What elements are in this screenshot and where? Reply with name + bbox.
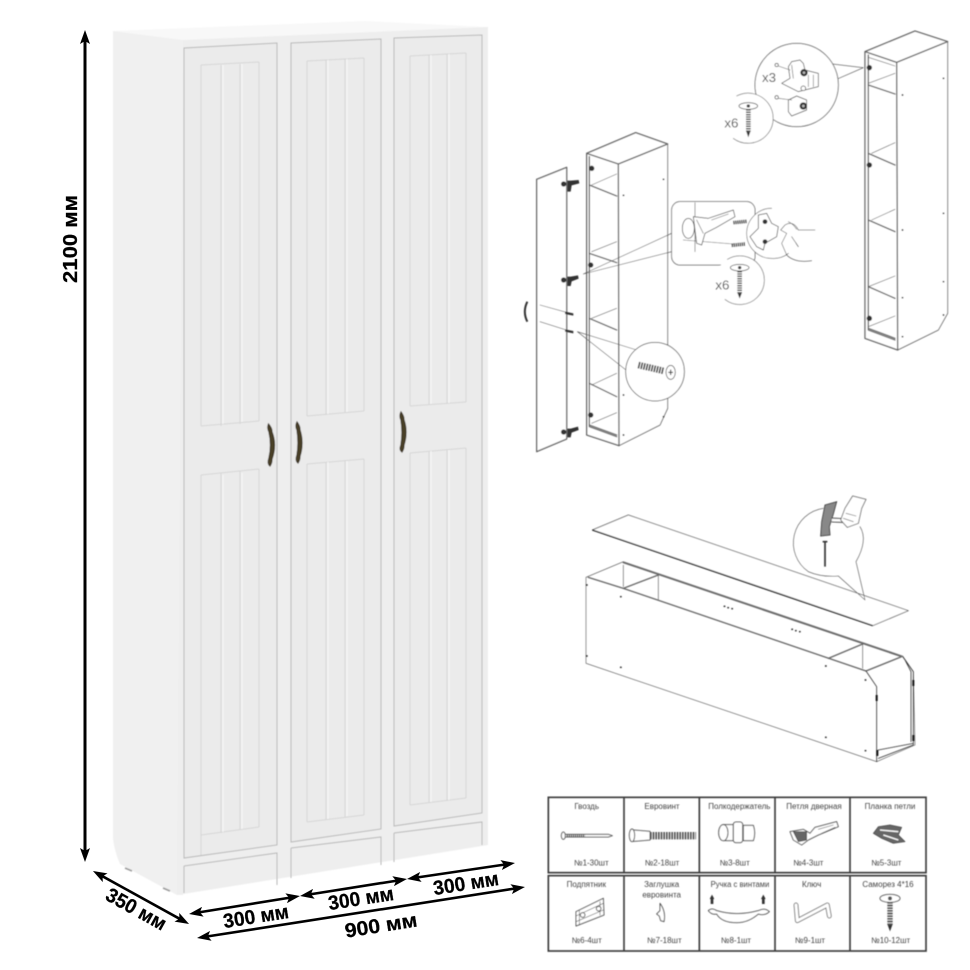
cell: self-tapping screw: №10-12шт xyxy=(871,936,911,945)
back panel sheet xyxy=(592,515,908,626)
cell: nail: №1-30шт xyxy=(574,858,609,867)
screw callout x6 top xyxy=(723,93,773,143)
wardrobe side panel xyxy=(113,31,183,895)
cell: euro screw: №2-18шт xyxy=(645,858,680,867)
cabinet carcass: left xyxy=(587,133,668,446)
cabinet carcass lying down xyxy=(586,562,915,762)
hinge plate callout xyxy=(755,43,863,127)
euro screw callout xyxy=(577,332,684,401)
cell: handle with screws xyxy=(708,880,769,945)
cell: allen key xyxy=(795,880,829,945)
width arrow: section 1 xyxy=(199,898,290,912)
cell: hinge plate: Планка петли xyxy=(865,802,915,811)
fittings table xyxy=(548,797,926,951)
cell: hinge plate xyxy=(865,802,915,867)
depth label: 350 мм xyxy=(102,884,170,935)
screw callout x6 middle: x6 xyxy=(715,277,729,292)
handle: left door xyxy=(268,424,274,466)
total width label: 900 мм xyxy=(343,909,419,943)
handle: right door xyxy=(400,412,406,452)
cell: euro screw xyxy=(629,802,696,867)
handle: middle door xyxy=(296,422,302,463)
width arrow: section 3 xyxy=(417,864,505,878)
height dimension arrow xyxy=(84,40,86,852)
hinge plate callout: x3 xyxy=(762,70,776,85)
mounting hinge callout xyxy=(583,202,755,274)
cell: cabinet leveler plate xyxy=(567,880,606,945)
cell: self-tapping screw: Саморез 4*16 xyxy=(862,880,914,889)
door panel xyxy=(537,167,579,452)
cell: door hinge xyxy=(786,802,842,867)
cell: allen key: №9-1шт xyxy=(795,936,825,945)
cell: shelf support: №3-8шт xyxy=(720,858,750,867)
cell: nail: Гвоздь xyxy=(574,802,599,811)
floor marks xyxy=(125,868,170,891)
door: left xyxy=(184,43,277,858)
cell: shelf support: Полкодержатель xyxy=(708,802,770,811)
screw callout x6 top: x6 xyxy=(724,115,738,130)
cell: cabinet leveler plate: Подпятник xyxy=(567,880,606,889)
cabinet carcass: right xyxy=(865,31,948,350)
cell: handle with screws: №8-1шт xyxy=(721,936,751,945)
door: middle xyxy=(291,39,381,842)
width arrow: section 2 xyxy=(310,881,397,894)
depth dimension arrow xyxy=(102,876,180,919)
cell: screw cap: евровинта xyxy=(642,890,682,899)
height label: 2100 мм xyxy=(60,195,82,283)
wardrobe front frame xyxy=(177,27,488,895)
width label: section 2: 300 мм xyxy=(327,883,395,915)
cell: screw cap xyxy=(642,880,682,945)
cell: cabinet leveler plate: №6-4шт xyxy=(572,936,602,945)
cell: door hinge: №4-3шт xyxy=(793,858,824,867)
wardrobe product view xyxy=(113,21,488,895)
total width arrow xyxy=(207,888,515,936)
cell: allen key: Ключ xyxy=(802,880,821,889)
cell: hinge plate: №5-3шт xyxy=(871,858,902,867)
cell: nail xyxy=(561,802,612,867)
wardrobe top surface xyxy=(113,21,488,40)
hand adjusting hinge callout xyxy=(747,208,815,261)
table row 2 xyxy=(548,876,926,951)
screw callout x6 middle xyxy=(715,256,764,304)
assembly diagram: back panel nailing xyxy=(586,496,915,762)
cell: screw cap: Заглушка xyxy=(644,880,680,889)
width label: section 1: 300 мм xyxy=(222,901,290,933)
door: right xyxy=(394,35,482,826)
width label: section 3: 300 мм xyxy=(432,868,500,900)
cell: self-tapping screw xyxy=(862,880,914,945)
assembly diagram: door hinges xyxy=(525,31,948,452)
cell: handle with screws: Ручка с винтами xyxy=(711,880,769,889)
plinth panels xyxy=(184,822,482,893)
door handle mark xyxy=(525,302,527,322)
cell: shelf support xyxy=(708,802,770,867)
table row 1 xyxy=(548,797,926,873)
cell: screw cap: №7-18шт xyxy=(647,936,682,945)
cell: euro screw: Евровинт xyxy=(644,802,680,811)
cell: door hinge: Петля дверная xyxy=(786,802,842,811)
hammer and nail callout xyxy=(793,496,866,600)
